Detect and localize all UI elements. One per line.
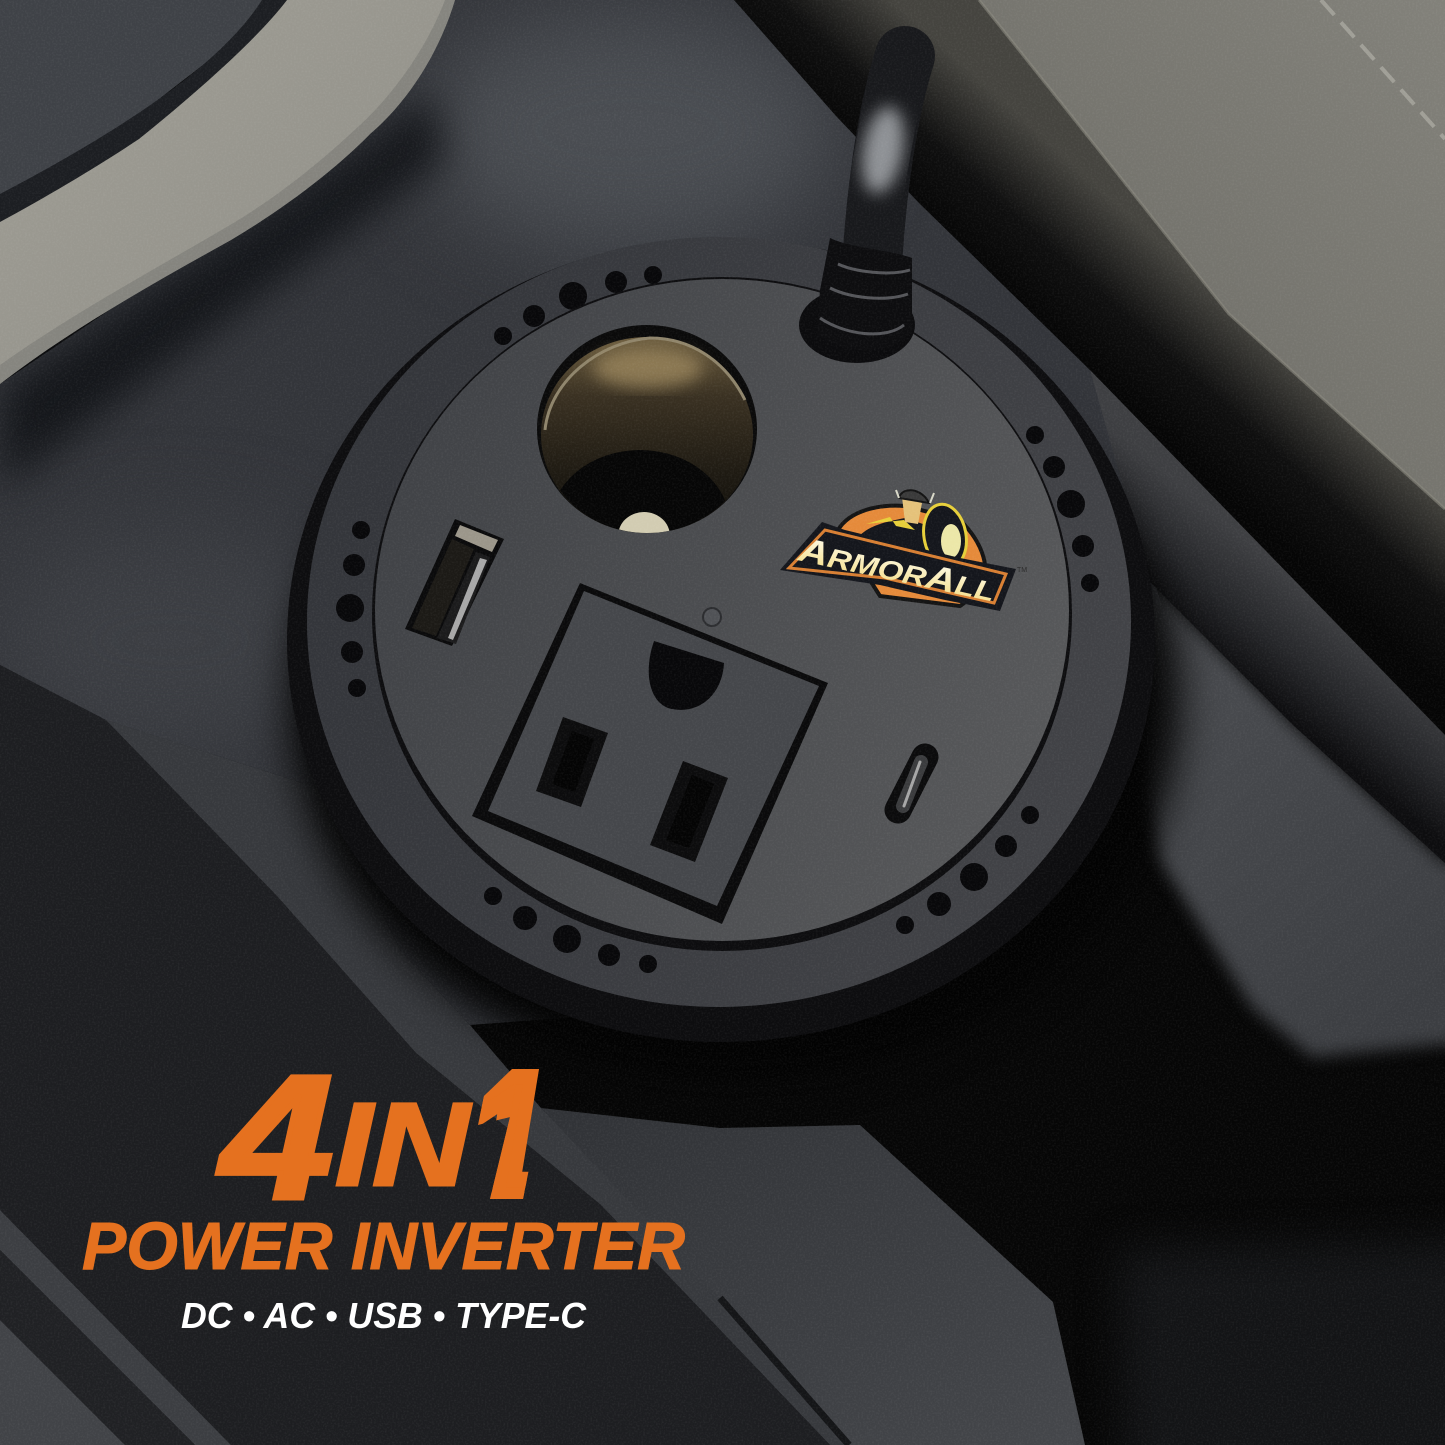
lower centre slab <box>541 1108 1085 1445</box>
woven floor mat <box>1120 1240 1445 1445</box>
trademark: TM <box>1017 567 1027 574</box>
device drop shadow <box>290 320 1180 1080</box>
outlet slots <box>536 717 608 807</box>
USB-C port <box>898 757 925 810</box>
cable strain relief <box>817 238 912 351</box>
console corner strips <box>0 1210 231 1445</box>
subheading: power inverter: POWER INVERTER <box>82 1209 685 1284</box>
feature list: DC • AC • USB • TYPE-C <box>181 1295 587 1336</box>
cable notch <box>799 287 915 363</box>
top ring <box>307 237 1131 1007</box>
upper leather console <box>0 0 1160 1025</box>
headline: 4 in 1: 4 <box>218 1040 333 1236</box>
headline: 4 in 1: 1 <box>462 1038 546 1239</box>
USB-A port <box>405 519 504 646</box>
headline: 4 in 1: IN <box>335 1079 472 1211</box>
seat fabric, top right <box>734 0 1445 735</box>
device: power inverter <box>287 56 1180 1080</box>
power cable <box>817 56 912 351</box>
ventilation holes <box>336 266 1099 973</box>
Armor All logo <box>780 490 1027 611</box>
right console slab <box>1130 582 1445 1057</box>
LED indicator <box>703 608 721 626</box>
logo wordmark: ARMOR ALL <box>794 530 999 609</box>
dark leather band <box>0 665 830 1445</box>
top plate <box>372 277 1072 951</box>
lit leather stripe <box>106 720 849 1445</box>
12V socket <box>537 325 757 533</box>
outer housing <box>287 238 1155 1042</box>
outlet ground hole <box>649 641 724 710</box>
headline: 4 in 1 <box>214 1069 539 1200</box>
console rim beside the seat <box>1090 370 1445 863</box>
door trim, top left <box>0 0 455 384</box>
AC outlet <box>472 583 828 924</box>
